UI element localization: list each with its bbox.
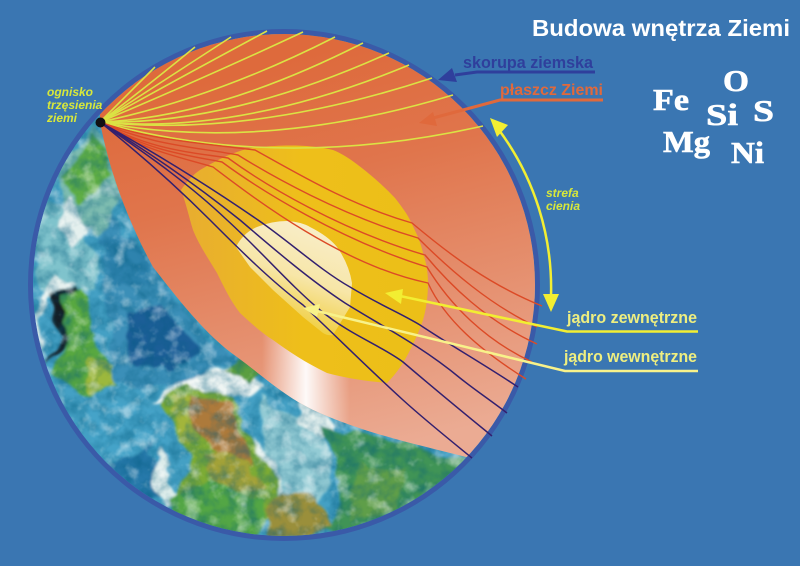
icon: earthquake focus point	[96, 118, 106, 128]
label: shadow zone: strefa	[546, 186, 579, 200]
callout: inner core: jądro wewnętrzne	[563, 347, 697, 366]
label: earthquake focus: ziemi	[46, 111, 78, 125]
seismic rays through inner core (navy)	[100, 122, 518, 458]
callout: mantle	[419, 82, 603, 126]
callout: shadow zone arrow	[490, 118, 559, 312]
callout: mantle: płaszcz Ziemi	[500, 82, 603, 99]
chemical elements	[653, 63, 774, 170]
callout: crust	[438, 54, 595, 82]
inner core	[236, 221, 352, 335]
seismic rays through outer core (red)	[100, 122, 542, 379]
mantle	[100, 34, 535, 458]
callout: outer core: jądro zewnętrzne	[566, 308, 697, 327]
chemical elements: Mg	[663, 124, 711, 159]
callout: outer core	[385, 289, 698, 332]
seismic rays: P waves in the mantle (yellow)	[100, 31, 483, 148]
chemical elements: Fe	[653, 82, 689, 117]
title: Budowa wnętrza Ziemi	[532, 15, 790, 41]
chemical elements: S	[753, 93, 774, 128]
label: earthquake focus: ognisko	[47, 85, 93, 99]
glow beneath core	[264, 335, 347, 423]
label: earthquake focus: trzęsienia	[47, 98, 103, 112]
globe crust ring	[28, 29, 540, 541]
chemical elements: Si	[706, 97, 738, 132]
outer core	[181, 145, 428, 383]
label: shadow zone: cienia	[546, 199, 580, 213]
globe surface map	[30, 34, 535, 545]
callout: crust: skorupa ziemska	[463, 54, 594, 72]
chemical elements: O	[723, 63, 749, 98]
chemical elements: Ni	[731, 135, 764, 170]
callout: inner core	[303, 304, 698, 371]
